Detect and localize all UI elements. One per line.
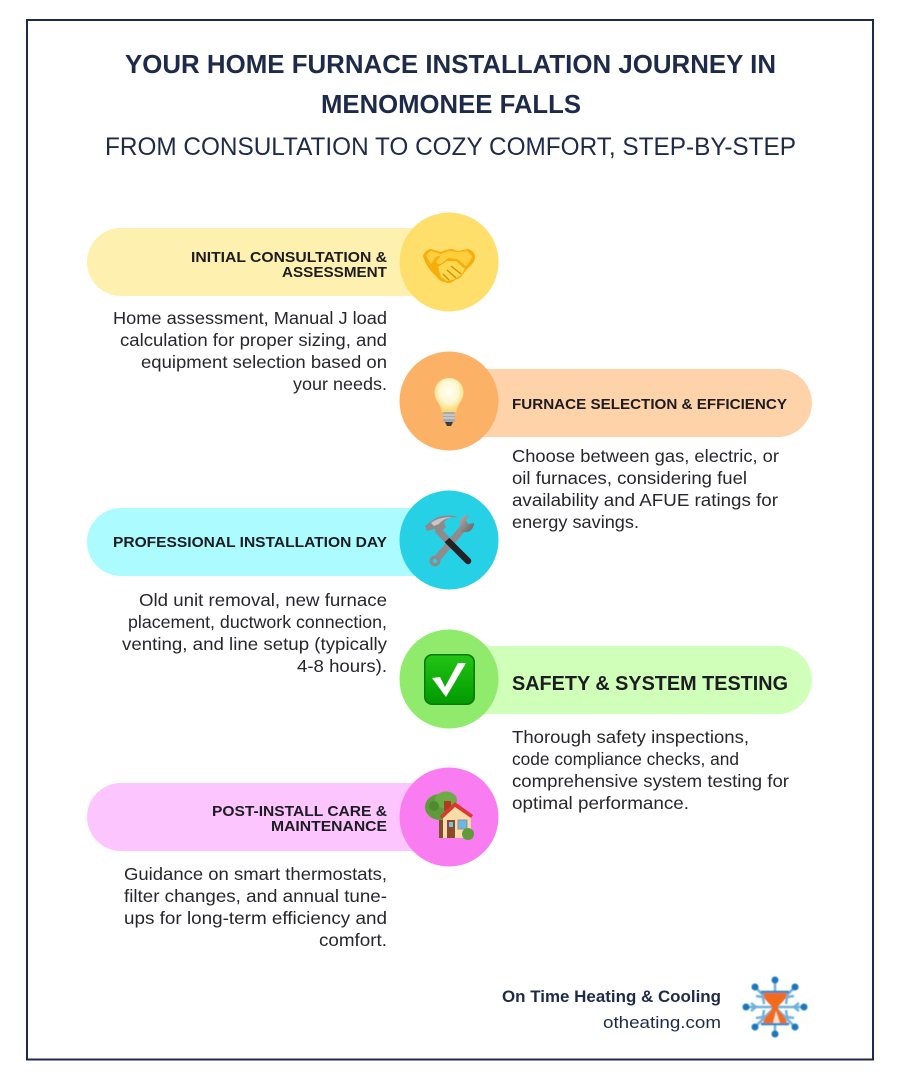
step 5 description [124,864,387,950]
step 3 description: placement, ductwork connection, [128,612,387,632]
footer brand: otheating.com [603,1013,721,1032]
step 3 description: Old unit removal, new furnace [139,590,387,610]
step 5 description: Guidance on smart thermostats, [124,864,387,884]
step 5 description: filter changes, and annual tune- [124,886,387,906]
step 1 description: your needs. [293,374,387,394]
step 3 circle [400,490,498,590]
icon: hammer and wrench [425,515,474,566]
step 2 heading: FURNACE SELECTION & EFFICIENCY [512,396,787,413]
icon: house with tree [425,792,474,840]
step 1 circle [400,212,498,312]
step 1: initial consultation [87,212,499,394]
step 1 heading: INITIAL CONSULTATION & [191,249,387,266]
step 1 description [113,308,387,394]
icon: handshake [423,249,475,283]
step 4 description: Thorough safety inspections, [512,727,749,747]
step 4 description: optimal performance. [512,793,689,813]
step 5 description: comfort. [319,930,387,950]
step 3 description [122,590,387,676]
step 5 heading: MAINTENANCE [271,818,387,835]
step 2 description [512,446,779,532]
step 5: post-install care [87,768,498,950]
step 4 description: comprehensive system testing for [512,771,789,791]
step 2 circle [400,352,498,450]
step 4 circle [400,630,498,728]
step 1 description: equipment selection based on [141,352,387,372]
logo: snowflake hourglass [742,976,808,1038]
icon: check mark [424,654,475,705]
step 4 description [512,727,789,813]
step 3 pill [87,508,440,576]
icon: light bulb [434,378,464,426]
step 5 heading: POST-INSTALL CARE & [212,803,387,820]
step 5 heading [212,803,387,835]
step 2 pill [458,369,812,437]
footer brand: On Time Heating & Cooling [502,988,721,1006]
step 3 heading: PROFESSIONAL INSTALLATION DAY [113,534,387,551]
title: YOUR HOME FURNACE INSTALLATION JOURNEY IN [125,49,776,79]
subtitle: FROM CONSULTATION TO COZY COMFORT, STEP-BY-STEP [105,133,796,161]
step 4 heading: SAFETY & SYSTEM TESTING [512,673,788,695]
step 5 circle [400,768,498,866]
step 3 description: venting, and line setup (typically [122,634,387,654]
step 3 description: 4-8 hours). [297,656,387,676]
title: MENOMONEE FALLS [321,89,581,119]
step 2: furnace selection [400,352,812,532]
step 1 heading: ASSESSMENT [282,264,387,281]
step 1 description: calculation for proper sizing, and [120,330,387,350]
step 1 description: Home assessment, Manual J load [113,308,387,328]
step 4 description: code compliance checks, and [512,749,739,769]
title [125,49,776,119]
footer brand [502,988,721,1032]
step 1 pill [87,228,440,296]
step 1 heading [191,249,387,281]
step 2 description: Choose between gas, electric, or [512,446,779,466]
step 4: safety testing [400,630,812,813]
step 4 pill [458,646,812,714]
step 5 description: ups for long-term efficiency and [124,908,387,928]
step 5 pill [87,783,440,851]
step 2 description: availability and AFUE ratings for [512,490,778,510]
step 2 description: oil furnaces, considering fuel [512,468,747,488]
step 2 description: energy savings. [512,512,639,532]
step 3: installation day [87,490,498,676]
